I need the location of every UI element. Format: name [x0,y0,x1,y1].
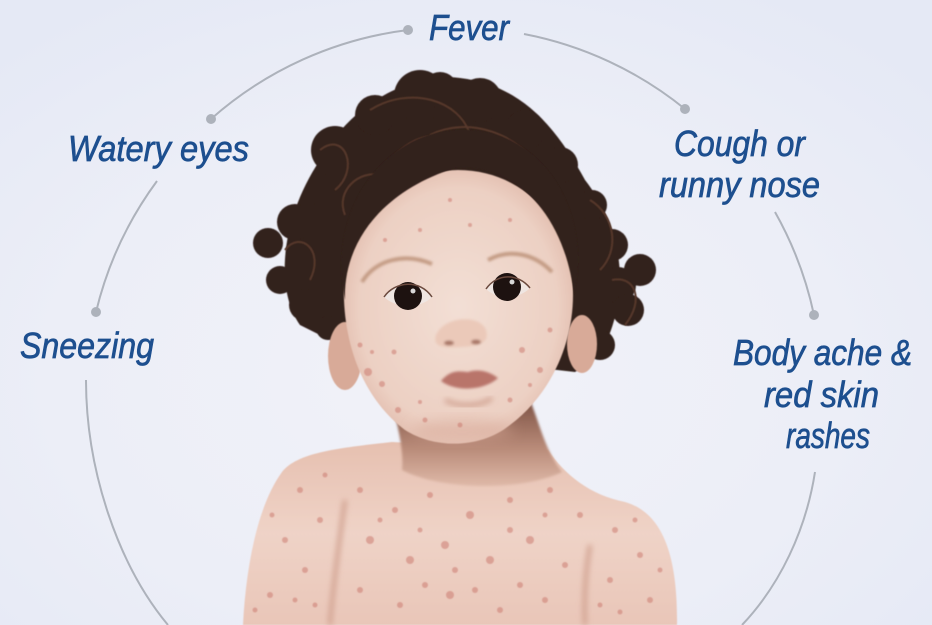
eyebrows [362,258,432,282]
label: Body ache and red skin rashes: red skin [764,374,879,415]
eyes [384,273,530,310]
symptom ring [86,25,819,625]
arm creases [330,500,590,625]
hair silhouette [253,70,656,372]
label: Cough or runny nose: Cough or [674,123,807,164]
nose [435,319,487,347]
label: Cough or runny nose: runny nose [659,164,820,205]
label: Body ache and red skin rashes [733,332,912,456]
face [344,170,573,444]
label: Cough or runny nose [659,123,820,205]
rash spots [252,198,662,614]
chin shading [445,398,492,405]
label: Body ache and red skin rashes: Body ache & [733,332,912,373]
hair curls [285,98,636,325]
mouth [441,370,498,389]
label: Sneezing: Sneezing [20,325,154,366]
torso and arms [243,442,677,625]
label: Body ache and red skin rashes: rashes [786,415,870,456]
neck [392,400,562,486]
ears [328,322,362,390]
label: Watery eyes: Watery eyes [68,128,249,169]
child portrait [243,70,677,625]
front hair [341,130,578,300]
label: Fever: Fever [429,7,511,48]
